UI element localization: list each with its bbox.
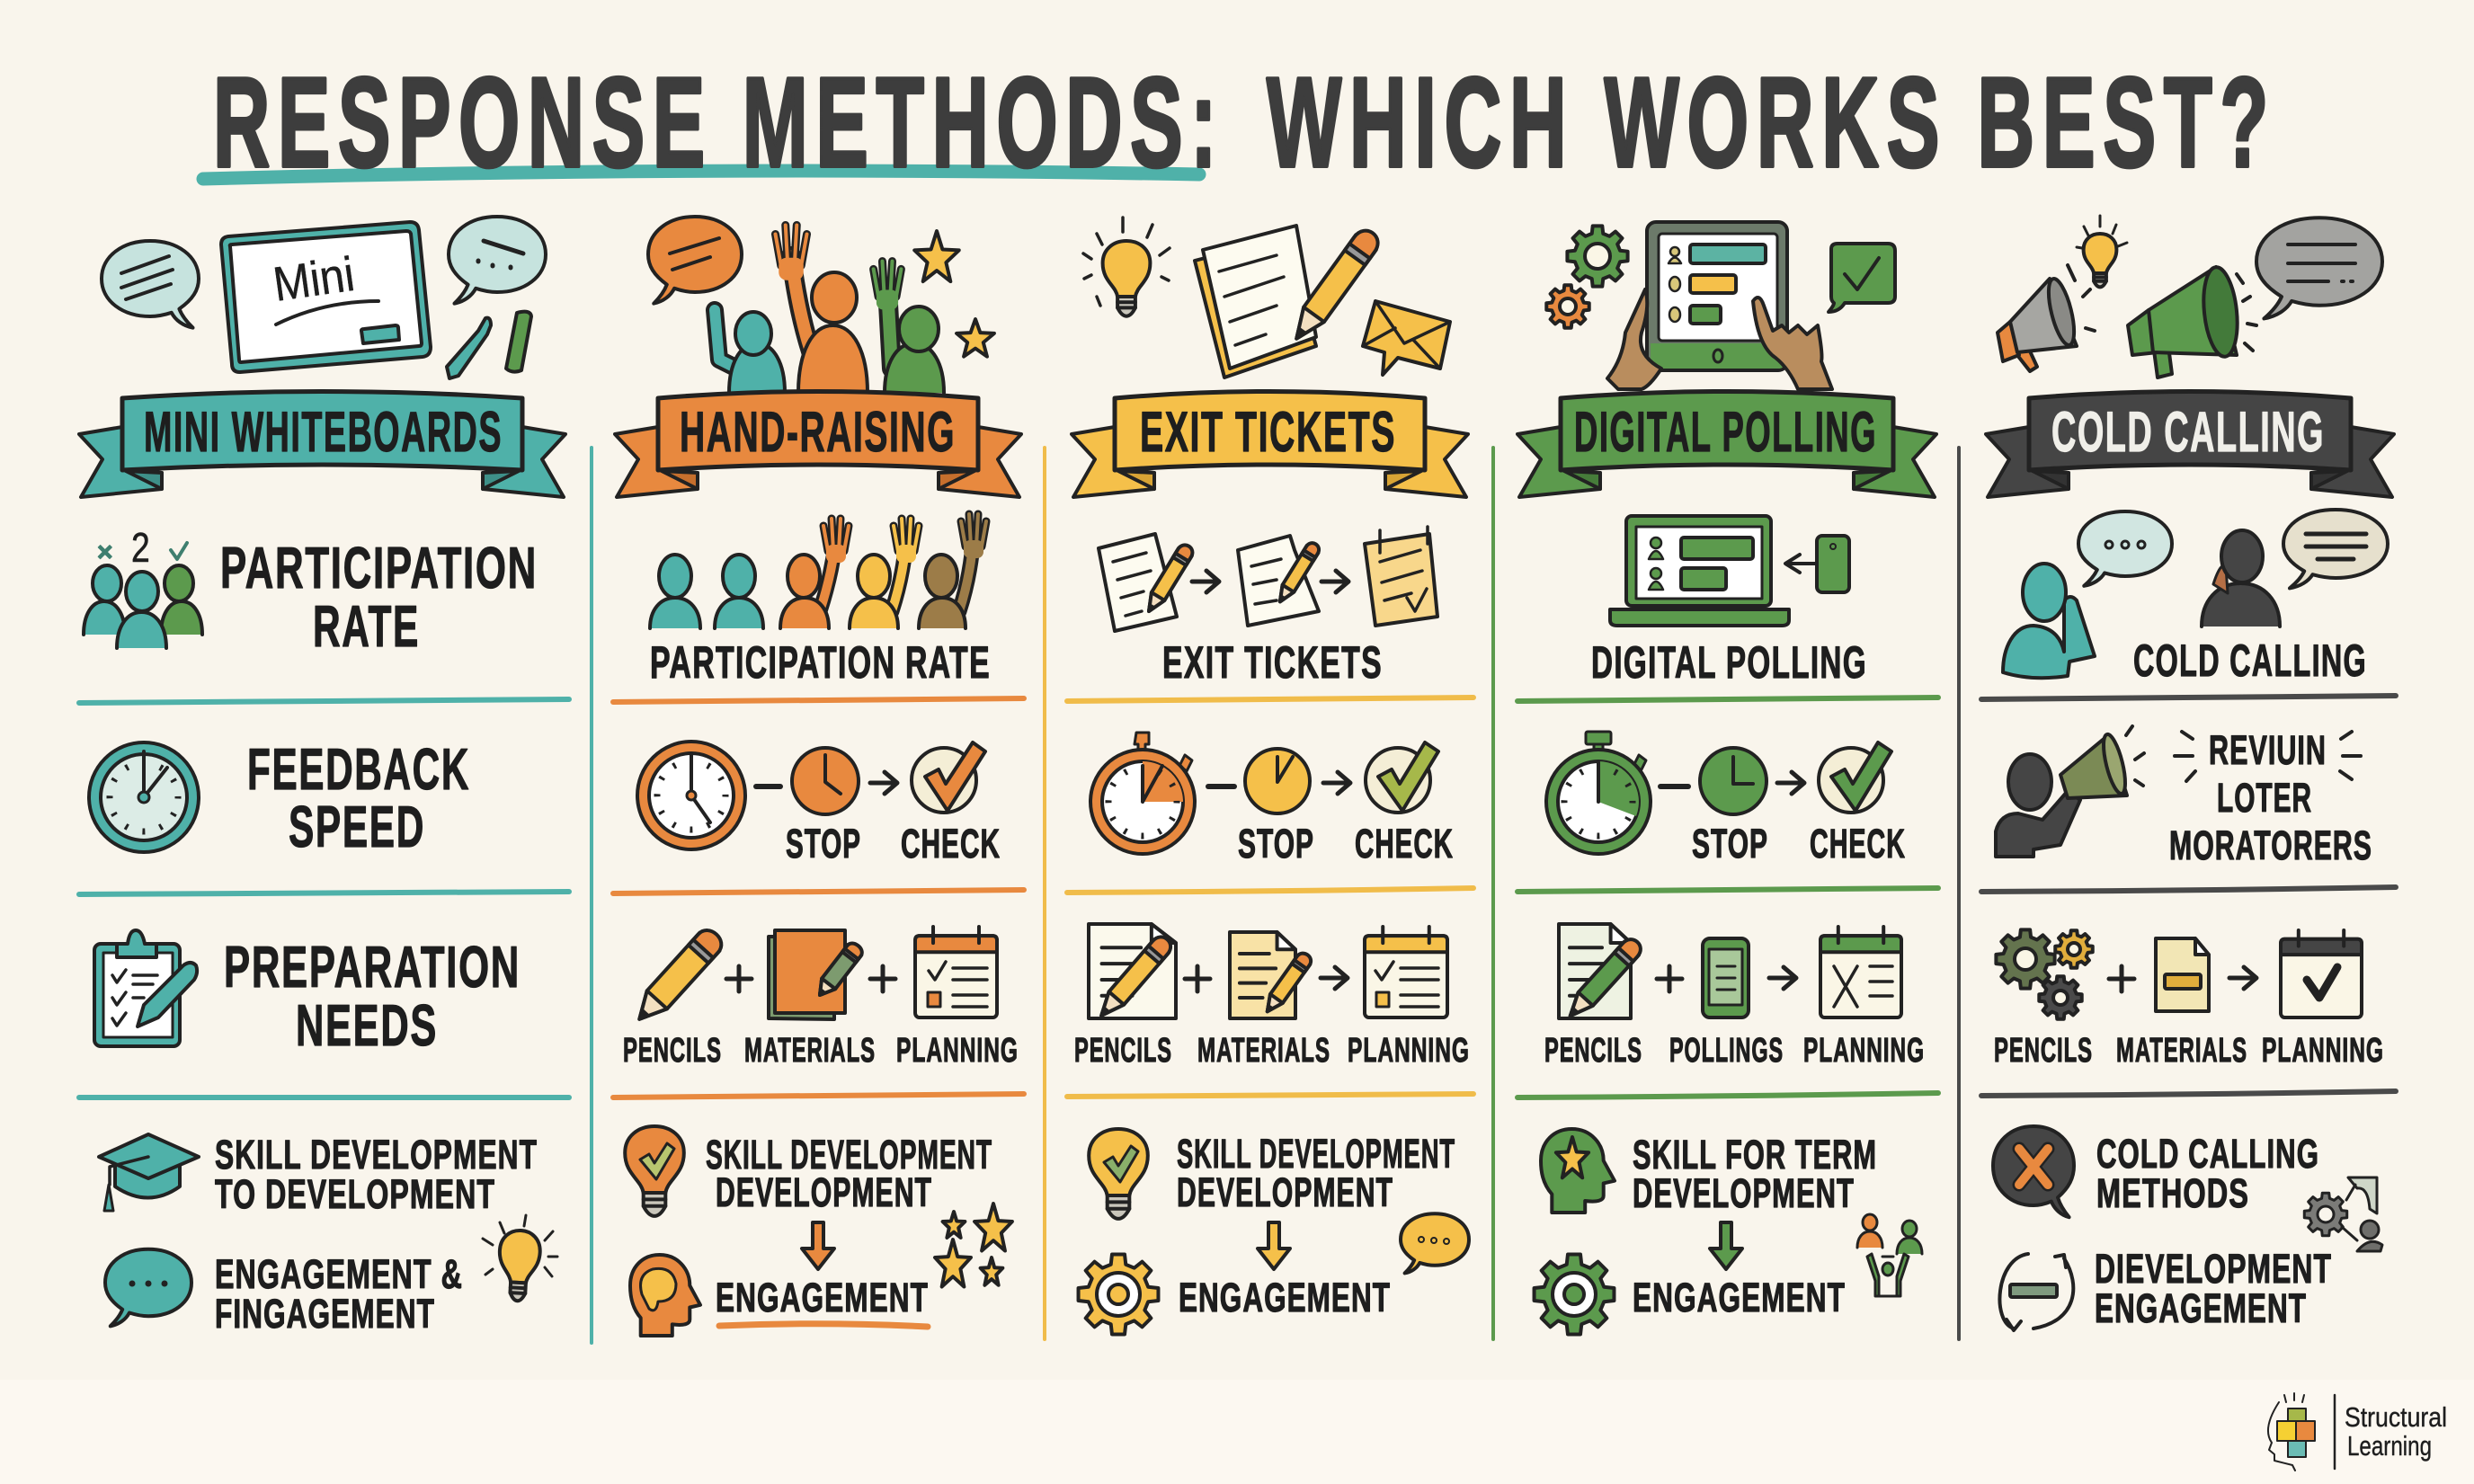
panel: hand-raising	[613, 217, 1024, 1336]
icon: materials document	[1230, 932, 1313, 1018]
row: skill development: SKILL DEVELOPMENT	[1177, 1131, 1455, 1177]
banner: digital polling: DIGITAL POLLING	[1574, 401, 1877, 464]
row: preparation items: PLANNING	[1348, 1032, 1470, 1070]
row: preparation items	[1544, 924, 1925, 1070]
arrow: down	[1258, 1222, 1290, 1269]
icon: phone	[1703, 938, 1749, 1017]
row: engagement: ENGAGEMENT	[1633, 1275, 1846, 1320]
row: stop and check: STOP	[1692, 821, 1768, 866]
row: preparation items: POLLINGS	[1669, 1032, 1784, 1070]
icon: plus	[1657, 966, 1682, 991]
icon: materials book and pen	[769, 930, 865, 1019]
row: exit tickets sequence: EXIT TICKETS	[1162, 637, 1383, 688]
row: preparation items: PENCILS	[623, 1032, 722, 1070]
icon: clock	[637, 742, 745, 849]
icon: person with megaphone	[1996, 726, 2144, 857]
row: skill development	[99, 1132, 538, 1217]
row: megaphone message: LOTER	[2217, 775, 2312, 821]
icon: stop clock	[1700, 748, 1767, 814]
rays around message	[2175, 732, 2361, 781]
row: engagement: ENGAGEMENT	[1179, 1275, 1391, 1320]
icon: calendar	[2281, 930, 2362, 1017]
icon: check	[1819, 742, 1891, 813]
row: exit tickets sequence	[1099, 527, 1437, 688]
icon: bulb with check	[1089, 1129, 1148, 1219]
icon: stars	[935, 1204, 1012, 1286]
icon: calendar	[915, 927, 997, 1017]
icon: head with brain	[630, 1255, 700, 1336]
banner: digital polling	[1517, 392, 1936, 497]
icon: laptop and phone	[1610, 516, 1849, 626]
row: participation rate: RATE	[313, 593, 420, 659]
icon: plus	[1185, 966, 1210, 991]
row: engagement: FINGAGEMENT	[215, 1291, 435, 1337]
illustration: tickets, pencil and envelope	[1083, 218, 1450, 378]
row: preparation items: MATERIALS	[744, 1032, 876, 1070]
icon: speech bubble	[1401, 1213, 1469, 1273]
illustration: whiteboard and speech bubbles	[102, 217, 546, 378]
icon: document and pencil	[1559, 924, 1644, 1023]
arrow	[870, 772, 897, 794]
icon: calendar	[1365, 927, 1447, 1017]
row: development engagement	[1999, 1246, 2332, 1331]
row: participation rate: PARTICIPATION	[220, 535, 538, 600]
row: development engagement: ENGAGEMENT	[2095, 1285, 2307, 1331]
row: preparation items	[1074, 924, 1470, 1070]
row: engagement	[1079, 1213, 1469, 1334]
row: skill development: DEVELOPMENT	[1633, 1170, 1855, 1216]
icon: bulb with check	[625, 1126, 684, 1216]
row: feedback speed: SPEED	[289, 794, 425, 859]
row: megaphone message	[1996, 726, 2372, 868]
row: megaphone message: MORATORERS	[2169, 822, 2372, 868]
row: skill development: SKILL DEVELOPMENT	[706, 1132, 992, 1177]
row: engagement: ENGAGEMENT &	[215, 1251, 463, 1297]
panel: mini whiteboards	[79, 217, 569, 1337]
row: cold calling methods	[1993, 1126, 2382, 1251]
row: engagement: ENGAGEMENT	[716, 1275, 929, 1320]
arrow	[1323, 772, 1350, 794]
illustration: megaphones and speech bubble	[1998, 216, 2382, 378]
row: preparation items: MATERIALS	[1197, 1032, 1330, 1070]
arrow: down	[802, 1222, 834, 1269]
banner: exit tickets: EXIT TICKETS	[1140, 401, 1396, 464]
icon: light bulb	[483, 1215, 557, 1302]
banner: hand-raising	[615, 392, 1021, 497]
icon: cross bubble	[1993, 1126, 2074, 1217]
panel: exit tickets	[1067, 218, 1473, 1334]
logo: structural learning: Learning	[2347, 1430, 2432, 1462]
row: preparation items: PLANNING	[896, 1032, 1019, 1070]
row: skill development	[1541, 1129, 1877, 1216]
arrow	[1321, 967, 1348, 989]
row: cold calling methods: METHODS	[2096, 1170, 2249, 1216]
banner: mini whiteboards	[79, 392, 565, 497]
row: stop and check	[637, 742, 1001, 866]
row: preparation items: MATERIALS	[2116, 1032, 2247, 1070]
row: stop and check: STOP	[1238, 821, 1314, 866]
row: stop and check: CHECK	[901, 821, 1001, 866]
banner: mini whiteboards: MINI WHITEBOARDS	[144, 401, 503, 464]
icon: students with raised hands	[650, 514, 986, 628]
icon: gear	[1535, 1255, 1614, 1334]
row: skill development: DEVELOPMENT	[716, 1169, 932, 1215]
row: digital polling laptop	[1591, 516, 1867, 688]
row: cold calling methods: COLD CALLING	[2096, 1131, 2319, 1177]
row: development engagement: DIEVELOPMENT	[2095, 1246, 2332, 1292]
icon: calendar	[1820, 927, 1901, 1017]
arrow: down	[1710, 1222, 1742, 1269]
row: participation rate	[650, 514, 991, 688]
title: RESPONSE METHODS:	[213, 51, 1224, 194]
row: engagement	[1535, 1214, 1922, 1334]
row: stop and check: STOP	[786, 821, 861, 866]
row: preparation items	[1994, 929, 2384, 1070]
row: skill development	[1089, 1129, 1455, 1219]
row: skill development: DEVELOPMENT	[1177, 1169, 1393, 1215]
row: stop and check: CHECK	[1810, 821, 1906, 866]
icon: network of gear and people	[2304, 1177, 2382, 1251]
icon: three tickets with arrows	[1099, 527, 1437, 631]
panel: cold calling	[1981, 216, 2396, 1331]
icon: pencil	[629, 925, 726, 1028]
row: digital polling laptop: DIGITAL POLLING	[1591, 637, 1867, 688]
row: participation rate	[84, 524, 538, 659]
row: participation rate: PARTICIPATION RATE	[650, 637, 991, 688]
panel: digital polling	[1517, 222, 1938, 1334]
logo: structural learning	[2268, 1393, 2447, 1471]
row: engagement	[105, 1215, 557, 1337]
row: stop and check	[1090, 733, 1454, 866]
icon: head with star	[1541, 1129, 1615, 1213]
icon: chat bubble	[105, 1249, 191, 1326]
icon: two people talking	[2003, 510, 2388, 678]
icon: stopwatch	[1090, 733, 1195, 854]
icon: group of students: ×	[97, 538, 114, 567]
row: preparation needs: PREPARATION	[224, 934, 521, 1000]
icon: stop clock	[1245, 749, 1310, 813]
row: skill development: SKILL DEVELOPMENT	[215, 1132, 538, 1177]
icon: check	[1366, 742, 1438, 813]
row: feedback speed: FEEDBACK	[247, 736, 470, 802]
icon: clipboard	[94, 930, 197, 1046]
row: preparation items	[623, 925, 1019, 1070]
row: stop and check: CHECK	[1355, 821, 1454, 866]
icon: graduation cap	[99, 1134, 199, 1211]
row: preparation items: PENCILS	[1074, 1032, 1172, 1070]
banner: exit tickets	[1072, 392, 1468, 497]
row: preparation needs	[94, 930, 521, 1058]
icon: plus	[726, 966, 752, 991]
row: skill development	[625, 1126, 992, 1216]
row: preparation needs: NEEDS	[296, 992, 438, 1058]
icon: document	[2156, 938, 2209, 1011]
row: megaphone message: REVIUIN	[2209, 727, 2327, 773]
icon: stopwatch	[1546, 732, 1651, 854]
icon: group of students	[84, 524, 202, 648]
icon: group of students: 2	[131, 524, 151, 571]
row: feedback speed	[89, 736, 470, 859]
row: preparation items: PENCILS	[1994, 1032, 2093, 1070]
icon: gears	[1996, 929, 2093, 1019]
icon: plus	[870, 966, 895, 991]
icon: check	[912, 742, 985, 813]
banner: hand-raising: HAND-RAISING	[680, 401, 956, 464]
logo: structural learning: Structural	[2345, 1401, 2447, 1433]
row: preparation items: PLANNING	[1803, 1032, 1925, 1070]
arrow	[1777, 772, 1804, 794]
icon: cycle	[1999, 1254, 2073, 1330]
arrow	[1769, 967, 1796, 989]
icon: plus	[2109, 966, 2134, 991]
icon: head with blocks	[2268, 1393, 2315, 1471]
row: skill development: SKILL FOR TERM	[1633, 1132, 1877, 1177]
icon: cheering people	[1857, 1214, 1922, 1296]
row: stop and check	[1546, 732, 1906, 866]
arrow	[2229, 967, 2256, 989]
row: preparation items: PENCILS	[1544, 1032, 1642, 1070]
illustration: tablet poll with gears	[1546, 222, 1895, 389]
row: skill development: TO DEVELOPMENT	[215, 1171, 495, 1217]
icon: clock	[89, 742, 199, 852]
illustration: students raising hands	[648, 217, 994, 393]
banner: cold calling	[1986, 392, 2394, 497]
row: preparation items: PLANNING	[2262, 1032, 2384, 1070]
row: cold calling conversation	[2003, 510, 2388, 686]
icon: gear	[1079, 1255, 1158, 1334]
icon: stop clock	[792, 748, 859, 814]
board word: Mini	[270, 247, 358, 312]
row: engagement	[630, 1204, 1012, 1336]
icon: document and pencil	[1089, 924, 1176, 1022]
